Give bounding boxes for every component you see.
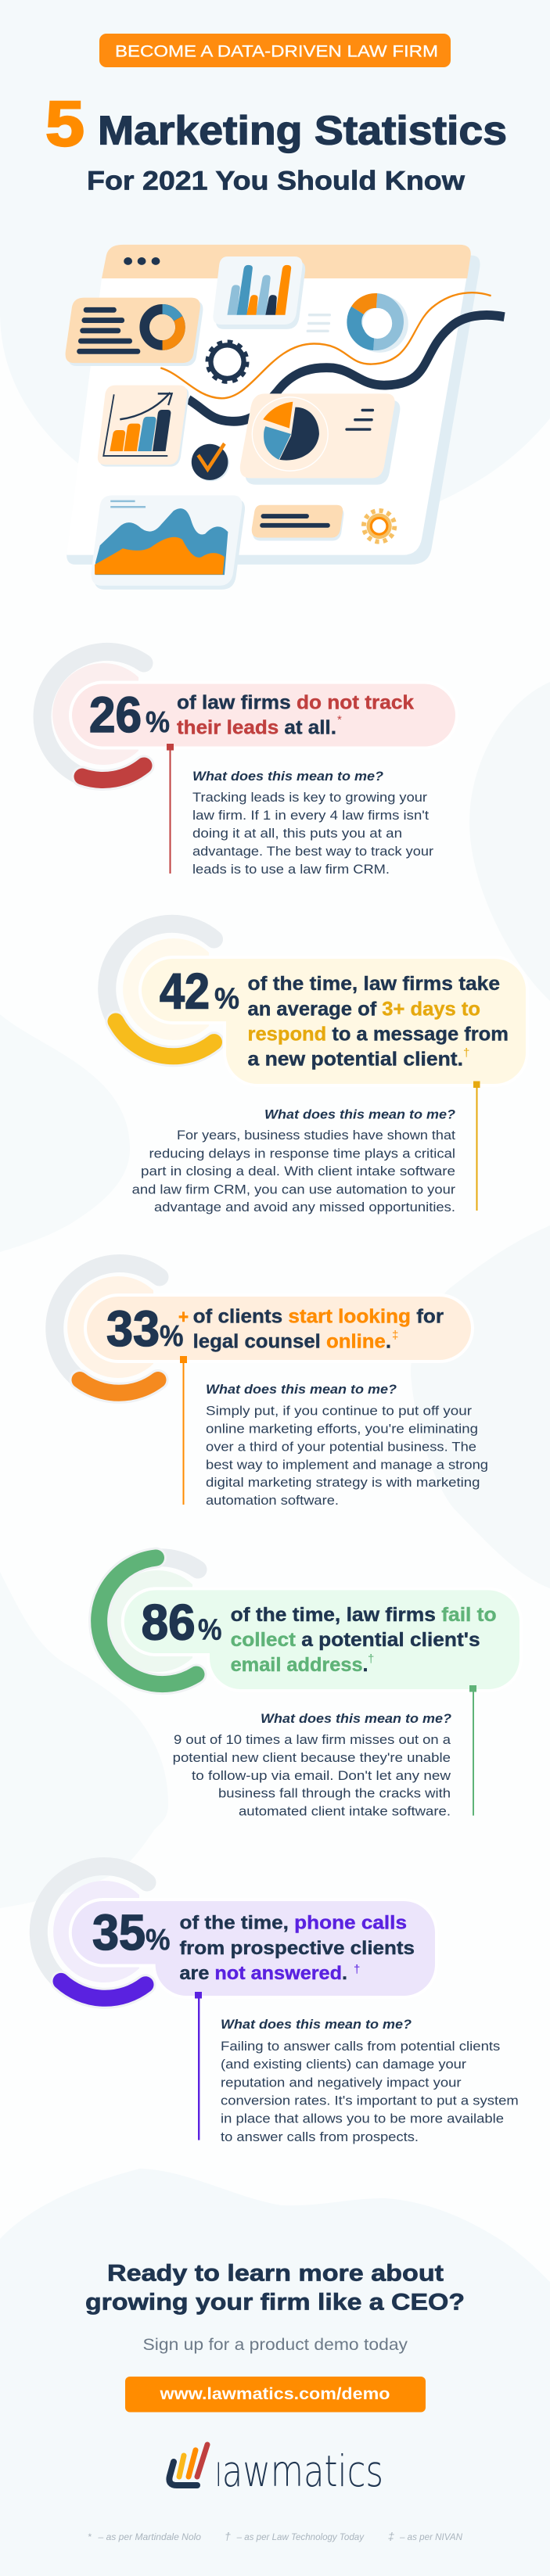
statement <box>247 973 509 1071</box>
call to action heading: Ready to learn more about <box>107 2261 444 2287</box>
call to action subtext: Sign up for a product demo today <box>142 2336 408 2354</box>
icon: logo mark <box>169 2445 207 2485</box>
explanation: and law firm CRM, you can use automation to your <box>132 1182 455 1197</box>
explanation: reputation and negatively impact your <box>221 2076 462 2090</box>
footnotes: * <box>88 2531 92 2542</box>
number: % <box>214 982 239 1015</box>
explanation: doing it at all, this puts you at an <box>192 826 402 841</box>
button: demo URL: www.lawmatics.com/demo <box>159 2385 390 2403</box>
explanation: What does this mean to me? <box>192 769 384 784</box>
illustration: analytics dashboard <box>66 245 505 590</box>
statement: * <box>337 713 342 727</box>
explanation <box>221 2017 519 2144</box>
statement: their leads at all. <box>177 716 336 738</box>
explanation: part in closing a deal. With client intake software <box>141 1164 455 1179</box>
statement <box>231 1604 497 1676</box>
connector <box>473 1081 480 1211</box>
footnotes: – as per Martindale Nolo <box>97 2531 201 2542</box>
wordmark: lawmatics <box>215 2446 383 2496</box>
explanation <box>206 1382 488 1508</box>
icon: donut chart <box>350 295 408 353</box>
widget: donut with lines <box>66 298 203 366</box>
button: demo URL <box>125 2377 426 2412</box>
call to action heading: growing your firm like a CEO? <box>85 2290 465 2316</box>
icon: yellow gear <box>364 511 394 542</box>
explanation: automated client intake software. <box>239 1804 451 1819</box>
widget: area chart <box>92 496 245 590</box>
badge: become a data-driven law firm <box>99 34 451 67</box>
footnotes <box>88 2530 462 2542</box>
callout pill <box>142 959 526 1084</box>
explanation: (and existing clients) can damage your <box>221 2057 466 2072</box>
statement <box>177 691 414 738</box>
widget: bar chart <box>213 257 305 329</box>
explanation: What does this mean to me? <box>221 2017 412 2032</box>
explanation: over a third of your potential business. The <box>206 1439 476 1454</box>
explanation: advantage. The best way to track your <box>192 844 433 859</box>
stat 2: 42% <box>107 924 526 1214</box>
explanation: What does this mean to me? <box>264 1107 456 1121</box>
connector <box>469 1685 476 1816</box>
explanation: best way to implement and manage a strong <box>206 1457 488 1472</box>
orange trend line <box>160 292 491 398</box>
widget: pie chart <box>240 393 400 485</box>
ring: 26% progress <box>42 651 144 780</box>
explanation: law firm. If 1 in every 4 law firms isn't <box>192 808 429 823</box>
explanation: to follow-up via email. Don't let any new <box>192 1768 451 1783</box>
statement: of clients start looking for <box>193 1306 444 1328</box>
explanation: Failing to answer calls from potential clients <box>221 2039 500 2054</box>
connector <box>167 744 174 874</box>
widget: text card <box>252 505 344 540</box>
explanation <box>173 1711 452 1819</box>
footnotes: – as per NIVAN <box>399 2531 462 2542</box>
number: % <box>146 706 170 739</box>
explanation: Simply put, if you continue to put off your <box>206 1403 472 1418</box>
explanation: business fall through the cracks with <box>218 1786 451 1801</box>
icon: navy gear <box>207 342 247 382</box>
statement: † <box>354 1963 360 1976</box>
footnotes: – as per Law Technology Today <box>236 2531 365 2542</box>
title: Marketing Statistics <box>98 109 507 154</box>
statement: legal counsel online. <box>193 1331 391 1353</box>
explanation: automation software. <box>206 1493 339 1508</box>
number: 35 <box>92 1904 146 1961</box>
explanation <box>192 769 433 877</box>
statement: an average of 3+ days to <box>247 999 480 1021</box>
stat 4: 86% <box>99 1558 519 1819</box>
statement: a new potential client. <box>247 1049 463 1071</box>
explanation: in place that allows you to be more available <box>221 2111 504 2126</box>
number: + <box>178 1307 189 1328</box>
ring: 86% progress <box>99 1558 198 1684</box>
widget: rising bar chart <box>98 386 189 467</box>
explanation: to answer calls from prospects. <box>221 2129 419 2144</box>
explanation: digital marketing strategy is with marketing <box>206 1475 480 1490</box>
ring: 35% progress <box>38 1866 147 1998</box>
explanation <box>132 1107 456 1214</box>
number: 26 <box>89 687 142 743</box>
explanation: conversion rates. It's important to put a system <box>221 2093 519 2108</box>
stat 5: 35% <box>38 1866 519 2144</box>
statement: of the time, law firms fail to <box>231 1604 497 1626</box>
navy trend line <box>189 315 505 422</box>
statement: collect a potential client's <box>231 1629 480 1651</box>
footnotes: † <box>225 2530 231 2542</box>
explanation: Tracking leads is key to growing your <box>192 790 427 805</box>
callout pill <box>72 683 455 746</box>
call to action heading <box>85 2261 465 2316</box>
statement: † <box>368 1652 374 1666</box>
statement: from prospective clients <box>180 1938 415 1959</box>
explanation: potential new client because they're unable <box>173 1750 451 1765</box>
statement: email address. <box>231 1654 368 1676</box>
explanation: For years, business studies have shown that <box>177 1128 455 1143</box>
explanation: online marketing efforts, you're eliminating <box>206 1421 478 1436</box>
statement: respond to a message from <box>247 1024 509 1046</box>
number <box>89 687 170 743</box>
statement: † <box>463 1046 469 1060</box>
statement: of the time, law firms take <box>247 973 500 995</box>
callout pill <box>87 1297 471 1360</box>
title <box>45 88 507 196</box>
explanation: leads is to use a law firm CRM. <box>192 862 390 877</box>
icon: check mark <box>192 443 229 481</box>
statement <box>180 1913 415 1984</box>
number: % <box>160 1320 183 1353</box>
callout pill <box>124 1590 519 1689</box>
number: 42 <box>160 963 210 1020</box>
title: 5 <box>45 88 84 160</box>
connector <box>195 1992 202 2140</box>
number: 33 <box>106 1301 160 1357</box>
statement: are not answered . <box>180 1963 347 1984</box>
number: % <box>146 1924 171 1957</box>
number <box>142 1594 222 1650</box>
title: For 2021 You Should Know <box>87 166 466 196</box>
footnotes: ‡ <box>388 2530 394 2542</box>
number: % <box>198 1614 222 1647</box>
statement: of the time, phone calls <box>180 1913 407 1933</box>
explanation: advantage and avoid any missed opportunities. <box>154 1200 455 1214</box>
stat 1: 26% <box>42 651 455 877</box>
statement: of law firms do not track <box>177 691 414 713</box>
explanation: reducing delays in response time plays a critical <box>149 1146 455 1161</box>
ring: 33% progress <box>55 1264 160 1393</box>
number <box>106 1301 189 1357</box>
number <box>160 963 239 1020</box>
connector <box>180 1356 187 1505</box>
stat 3: 33% <box>55 1264 488 1508</box>
callout pill <box>72 1901 435 1996</box>
number: 86 <box>142 1594 196 1650</box>
logo: lawmatics <box>169 2445 383 2496</box>
explanation: What does this mean to me? <box>261 1711 452 1726</box>
statement: ‡ <box>392 1329 398 1342</box>
ring: 42% progress <box>107 924 214 1057</box>
explanation: What does this mean to me? <box>206 1382 397 1397</box>
explanation: 9 out of 10 times a law firm misses out on a <box>174 1732 451 1747</box>
statement <box>193 1306 444 1353</box>
badge: become a data-driven law firm: BECOME A DATA-DRIVEN LAW FIRM <box>115 43 438 61</box>
